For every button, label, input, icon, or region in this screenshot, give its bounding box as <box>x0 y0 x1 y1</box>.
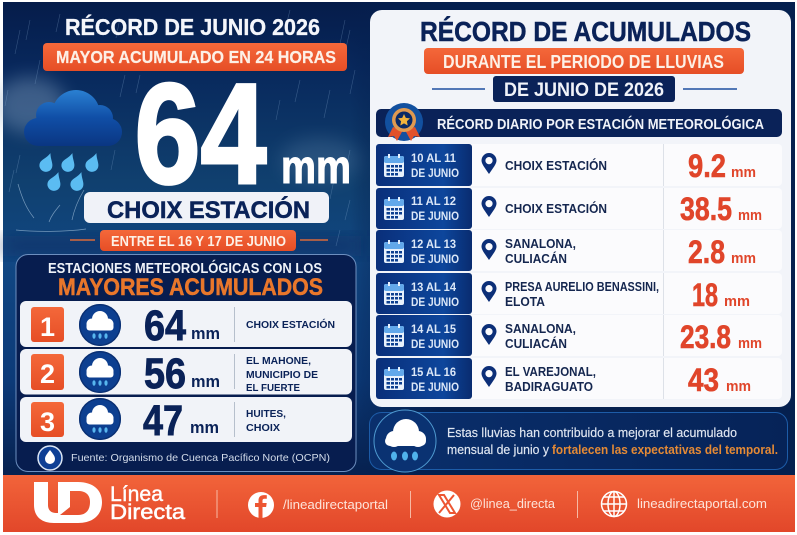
icon: rain cloud <box>24 90 122 193</box>
icon: white rain cloud <box>374 410 436 472</box>
row: 11 al 12 de junio: mm <box>738 207 762 224</box>
row: 15 al 16 de junio: mm <box>726 378 751 395</box>
main figure: 64 mm: mm <box>281 140 351 193</box>
row: 13 al 14 de junio: mm <box>724 293 750 310</box>
row: 11 al 12 de junio: 38.5 <box>680 191 732 227</box>
row: 10 al 11 de junio: CHOIX ESTACIÓN <box>505 158 607 173</box>
rank row 1: 64 <box>144 302 186 350</box>
row: 11 al 12 de junio <box>376 188 782 229</box>
row: 14 al 15 de junio: mm <box>738 335 762 352</box>
row: 12 al 13 de junio <box>376 230 782 271</box>
main figure: 64 mm: 64 <box>134 55 266 214</box>
row: 14 al 15 de junio: SANALONA, <box>505 322 576 336</box>
row: 14 al 15 de junio: 14 AL 15 <box>411 322 456 336</box>
row: 15 al 16 de junio: 15 AL 16 <box>411 365 456 379</box>
row: 13 al 14 de junio: DE JUNIO <box>411 295 459 309</box>
section header bar: RÉCORD DIARIO POR ESTACIÓN METEOROLÓGICA <box>437 115 764 133</box>
date banner: ENTRE EL 16 Y 17 DE JUNIO <box>111 234 286 250</box>
rank row 2: EL FUERTE <box>246 382 300 394</box>
row: 14 al 15 de junio: DE JUNIO <box>411 337 459 351</box>
row: 11 al 12 de junio: 11 AL 12 <box>411 194 456 208</box>
row: 15 al 16 de junio: EL VAREJONAL, <box>505 365 596 379</box>
rank row 1: 1 <box>40 312 55 342</box>
rank row 2: EL MAHONE, <box>246 355 311 367</box>
row: 10 al 11 de junio <box>376 144 782 186</box>
orange banner: periodo de lluvias <box>424 48 744 74</box>
row: 10 al 11 de junio: 9.2 <box>688 148 726 184</box>
row: 15 al 16 de junio <box>376 358 782 399</box>
panel: stations with highest accumulations <box>16 254 356 472</box>
orange banner: mayor acumulado <box>43 43 347 71</box>
rank row 3: 3 <box>40 407 55 437</box>
row: 12 al 13 de junio: CULIACÁN <box>505 251 567 266</box>
footer bar <box>3 475 795 532</box>
panel: daily records <box>370 10 791 407</box>
callout: rain contribution note <box>370 410 788 472</box>
navy banner: de junio de 2026 <box>432 76 737 102</box>
orange banner: mayor acumulado: MAYOR ACUMULADO EN 24 HORAS <box>56 47 336 67</box>
X handle <box>434 490 555 518</box>
callout text: Estas lluvias han contribuido a mejorar el acumulado <box>447 426 737 440</box>
row: 11 al 12 de junio: CHOIX ESTACIÓN <box>505 201 607 216</box>
row: 13 al 14 de junio: ELOTA <box>505 295 545 309</box>
row: 12 al 13 de junio: mm <box>731 250 756 267</box>
row: 13 al 14 de junio: PRESA AURELIO BENASSINI, <box>505 280 659 294</box>
rank row 3: mm <box>190 418 219 437</box>
row: 14 al 15 de junio <box>376 315 782 356</box>
rank row 1 <box>20 301 352 350</box>
rank row 2: 56 <box>144 350 186 398</box>
website: lineadirectaportal.com <box>637 497 767 511</box>
X handle: @linea_directa <box>470 497 555 511</box>
icon: medal <box>385 103 423 141</box>
rank row 2: mm <box>191 372 220 391</box>
callout text: mensual de junio y <box>447 443 550 457</box>
row: 13 al 14 de junio <box>376 273 782 314</box>
navy banner: de junio de 2026: DE JUNIO DE 2026 <box>504 80 664 101</box>
website <box>602 492 767 516</box>
row: 10 al 11 de junio: mm <box>731 164 756 181</box>
panel heading: MAYORES ACUMULADOS <box>58 274 323 301</box>
row: 14 al 15 de junio: CULIACÁN <box>505 336 567 351</box>
row: 10 al 11 de junio: DE JUNIO <box>411 166 459 180</box>
row: 12 al 13 de junio: 12 AL 13 <box>411 237 456 251</box>
callout text: fortalecen las expectativas del temporal. <box>552 443 778 457</box>
callout text <box>447 426 778 457</box>
logo: Línea Directa: Línea <box>110 483 163 506</box>
rank row 2: 2 <box>40 359 55 389</box>
row: 11 al 12 de junio: DE JUNIO <box>411 209 459 223</box>
rank row 3: 47 <box>143 397 183 445</box>
date banner <box>70 230 328 251</box>
row: 12 al 13 de junio: SANALONA, <box>505 237 576 251</box>
section header bar <box>376 109 782 137</box>
rank row 1: mm <box>191 324 220 343</box>
source note: Fuente: Organismo de Cuenca Pacífico Norte (OCPN) <box>71 452 330 464</box>
rank row 3 <box>20 397 352 445</box>
panel heading: ESTACIONES METEOROLÓGICAS CON LOS <box>48 259 322 277</box>
water splash <box>16 184 86 231</box>
rank row 1: CHOIX ESTACIÓN <box>246 318 335 331</box>
logo: Línea Directa: Directa <box>110 501 185 524</box>
logo: Línea Directa <box>34 482 185 524</box>
row: 12 al 13 de junio: DE JUNIO <box>411 252 459 266</box>
source note <box>38 446 330 470</box>
row: 15 al 16 de junio: 43 <box>688 362 719 398</box>
left title: RÉCORD DE JUNIO 2026 <box>65 13 320 40</box>
row: 12 al 13 de junio: 2.8 <box>688 234 725 270</box>
rank row 3: HUITES, <box>246 408 286 420</box>
rank row 2: MUNICIPIO DE <box>246 369 318 381</box>
row: 10 al 11 de junio: 10 AL 11 <box>411 151 456 165</box>
facebook handle <box>248 492 388 518</box>
facebook handle: /lineadirectaportal <box>283 498 388 512</box>
rank row 2 <box>20 349 352 398</box>
row: 14 al 15 de junio: 23.8 <box>680 319 731 355</box>
rank row 3: CHOIX <box>246 422 280 434</box>
panel heading <box>48 259 323 301</box>
row: 13 al 14 de junio: 18 <box>692 277 718 313</box>
right title: RÉCORD DE ACUMULADOS <box>420 16 751 47</box>
row: 15 al 16 de junio: DE JUNIO <box>411 380 459 394</box>
row: 13 al 14 de junio: 13 AL 14 <box>411 280 456 294</box>
station label: Choix Estación: CHOIX ESTACIÓN <box>107 196 310 224</box>
orange banner: periodo de lluvias: DURANTE EL PERIODO DE LLUVIAS <box>443 52 724 72</box>
row: 15 al 16 de junio: BADIRAGUATO <box>505 380 593 394</box>
